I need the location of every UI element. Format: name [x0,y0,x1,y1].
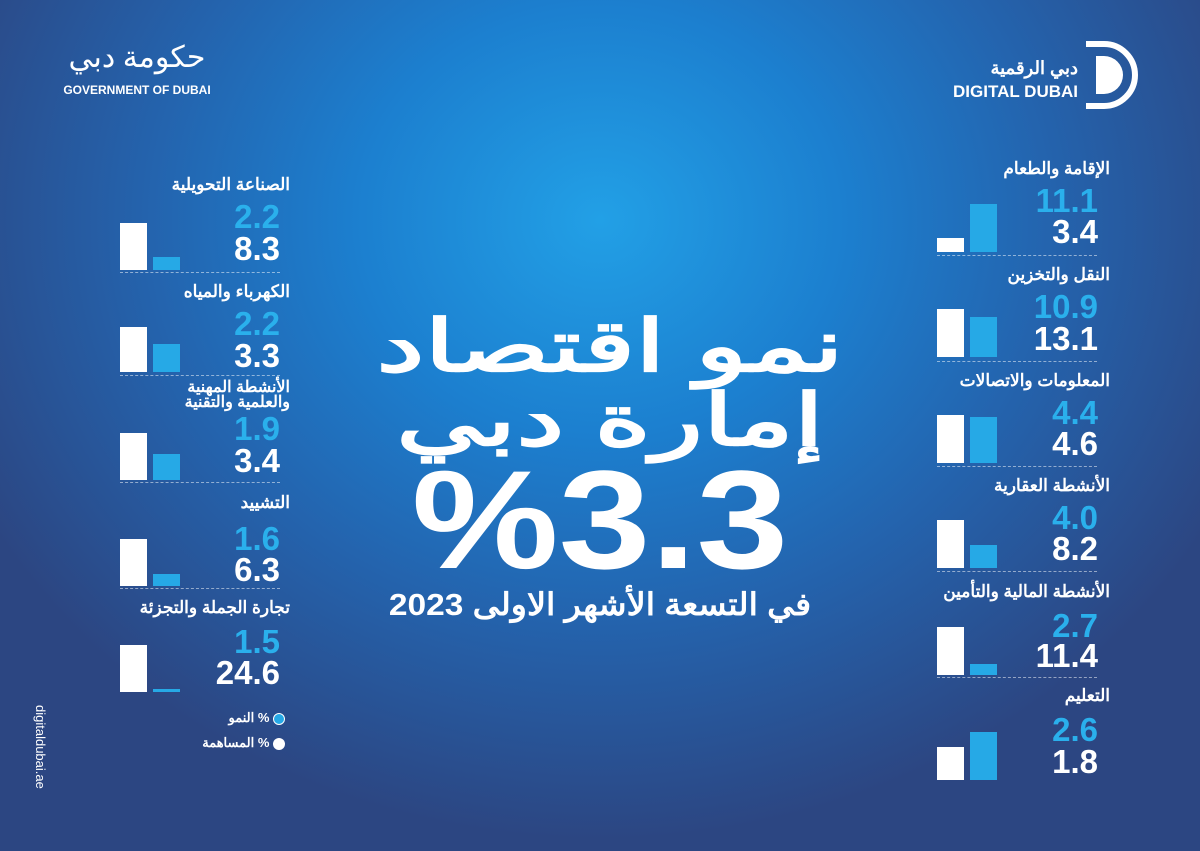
item: professional: الأنشطة المهنية [187,379,290,396]
item: transport: النقل والتخزين [1008,265,1110,284]
item: finance: 2.7 [1052,607,1098,644]
subtitle: في التسعة الأشهر الاولى 2023 [389,587,811,622]
item: finance [937,580,1110,675]
logo: digital dubai: DIGITAL DUBAI [953,82,1078,101]
item: professional: 1.9 [234,410,280,447]
item: electricity: 3.3 [234,337,280,374]
legend: % النمو [228,710,269,725]
item: professional: والعلمية والتقنية [185,394,290,411]
item: construction: التشييد [241,493,290,512]
item: real estate [937,474,1110,568]
item: finance: الأنشطة المالية والتأمين [943,582,1110,601]
title: نمو اقتصاد [376,307,844,387]
logo: government of dubai: GOVERNMENT OF DUBAI [63,83,211,97]
item: electricity: 2.2 [234,305,280,342]
item: construction [120,493,290,588]
item: manufacturing [120,175,290,270]
panel: right sectors [937,159,1110,780]
item: education: التعليم [1065,686,1110,705]
item: trade: 1.5 [234,623,280,660]
item: ICT: 4.4 [1052,394,1098,431]
legend [202,710,285,750]
logo: digital dubai [953,41,1138,109]
item: real estate: الأنشطة العقارية [994,476,1110,495]
item: trade: تجارة الجملة والتجزئة [140,598,290,617]
item: electricity [120,282,290,374]
item: electricity: الكهرباء والمياه [184,282,290,301]
logo: government of dubai: حكومة دبي [68,41,205,74]
item: education: 2.6 [1052,711,1098,748]
item: trade: 24.6 [216,654,280,691]
item: ICT [937,371,1110,463]
item: finance: 11.4 [1036,637,1098,674]
item: ICT: المعلومات والاتصالات [960,371,1110,390]
item: ICT: 4.6 [1052,425,1098,462]
item: manufacturing: 2.2 [234,198,280,235]
logo: government of dubai [63,41,211,97]
legend: % المساهمة [202,735,269,750]
item: construction: 1.6 [234,520,280,557]
text: digitaldubai.ae [33,705,48,789]
item: trade [120,598,290,692]
item: accommodation [937,159,1110,252]
item: manufacturing: الصناعة التحويلية [172,175,290,194]
item: real estate: 4.0 [1052,499,1098,536]
item: manufacturing: 8.3 [234,230,280,267]
logo: digital dubai: دبي الرقمية [990,58,1078,78]
item: transport: 13.1 [1034,320,1098,357]
item: real estate: 8.2 [1052,530,1098,567]
headline figure: %3.3 [412,441,788,598]
item: education: 1.8 [1052,743,1098,780]
item: transport [937,265,1110,357]
item: accommodation: 11.1 [1036,182,1098,219]
title [376,307,844,464]
item: education [937,686,1110,780]
item: accommodation: 3.4 [1052,213,1098,250]
item: transport: 10.9 [1034,288,1098,325]
title: إمارة دبي [396,381,824,461]
item: construction: 6.3 [234,551,280,588]
item: professional [120,376,290,480]
panel: left sectors [120,175,290,692]
item: professional: 3.4 [234,442,280,479]
item: accommodation: الإقامة والطعام [1003,159,1110,178]
